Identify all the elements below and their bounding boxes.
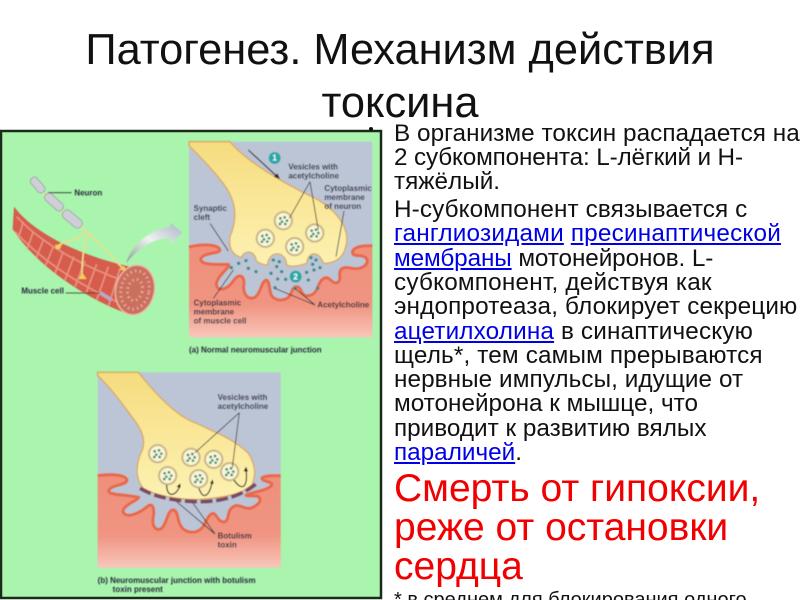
axon terminal: [189, 142, 347, 266]
diagram: junction with botulism toxin: [98, 372, 281, 594]
diagram: muscle cell and neuron: Muscle cell: [21, 287, 64, 296]
callout: cause of death: [394, 467, 760, 588]
text block: pathogenesis description: ганглиозидами пресинаптической: [394, 220, 781, 247]
diagram: normal neuromuscular junction: membrane: [194, 307, 235, 316]
axon terminal: [98, 372, 255, 499]
diagram: normal neuromuscular junction: Acetylcholine: [317, 301, 370, 310]
text block: pathogenesis description: щель*, тем самым прерываются: [394, 342, 763, 369]
diagram: normal neuromuscular junction: 1: [272, 154, 277, 163]
text block: pathogenesis description: субкомпонент, действуя как: [394, 269, 712, 296]
text block: pathogenesis description: эндопротеаза, блокирует секрецию: [394, 293, 797, 320]
diagram: normal neuromuscular junction: membrane: [324, 193, 365, 202]
callout: cause of death: реже от остановки: [394, 506, 728, 549]
leader lines: [210, 182, 344, 305]
botulism toxin: [140, 483, 257, 502]
muscle tissue and folded membrane: [98, 475, 281, 568]
muscle tissue and folded membrane: [189, 245, 372, 337]
text block: pathogenesis description: нервные импульсы, идущие от: [394, 366, 743, 393]
diagram: muscle cell and neuron: [13, 176, 182, 318]
labels: Vesicles with: [288, 163, 338, 172]
diagram: normal neuromuscular junction: [189, 142, 372, 354]
diagram: junction with botulism toxin: toxin present: [113, 585, 163, 594]
acetylcholine dots: [230, 256, 322, 290]
diagram: normal neuromuscular junction: (a) Normal neuromuscular junction: [189, 345, 322, 354]
neuron: [29, 176, 126, 279]
diagram: normal neuromuscular junction: Cytoplasmic: [324, 184, 372, 193]
text block: pathogenesis description: мембраны мотонейронов. L-: [394, 245, 713, 272]
diagram: junction with botulism toxin: (b) Neuromuscular junction with botulism: [98, 576, 256, 585]
arrow 1 and step badges: [248, 150, 278, 178]
callout: cause of death: Смерть от гипоксии,: [394, 467, 760, 510]
labels: Vesicles with: [218, 393, 267, 402]
text block: pathogenesis description: параличей.: [394, 439, 522, 466]
diagram: normal neuromuscular junction: acetylcholine: [288, 172, 339, 181]
leader lines: [177, 413, 239, 534]
diagram: normal neuromuscular junction: Cytoplasmic: [194, 298, 242, 307]
title: Патогенез. Механизм действия: [85, 26, 715, 74]
muscle fibre: [13, 207, 159, 318]
vesicles: [275, 212, 292, 229]
diagram: normal neuromuscular junction: 2: [293, 272, 298, 281]
text block: pathogenesis description: В организме токсин распадается на: [394, 120, 800, 147]
text block: pathogenesis description: мотонейрона к мышце, что: [394, 390, 698, 417]
green background panel: [1, 131, 381, 598]
text block: pathogenesis description: ацетилхолина в синаптическую: [394, 318, 753, 345]
diagram: muscle cell and neuron: Neuron: [74, 188, 102, 197]
diagram: normal neuromuscular junction: of muscle cell: [194, 316, 246, 325]
callout: cause of death: сердца: [394, 545, 523, 588]
title: токсина: [321, 79, 478, 127]
arrow to enlarged view: [126, 223, 182, 263]
diagram: normal neuromuscular junction: cleft: [194, 213, 210, 222]
text block: pathogenesis description: Н-субкомпонент связывается с: [394, 196, 747, 223]
text block: pathogenesis description: тяжёлый.: [394, 168, 500, 195]
diagram: junction with botulism toxin: Botulism: [218, 531, 252, 540]
diagram: normal neuromuscular junction: Synaptic: [194, 204, 228, 213]
vesicles: [149, 445, 166, 462]
labels: [48, 193, 100, 293]
text block: pathogenesis description: приводит к развитию вялых: [394, 415, 706, 442]
curved arrows: [167, 468, 246, 496]
bullet: [369, 127, 373, 131]
text block: pathogenesis description: [394, 120, 800, 466]
diagram: junction with botulism toxin: toxin: [218, 540, 237, 549]
text block: pathogenesis description: 2 субкомпонента: L-лёгкий и Н-: [394, 144, 743, 171]
diagram: normal neuromuscular junction: of neuron: [324, 202, 361, 211]
diagram: junction with botulism toxin: acetylcholine: [218, 402, 269, 411]
title: [85, 26, 715, 127]
